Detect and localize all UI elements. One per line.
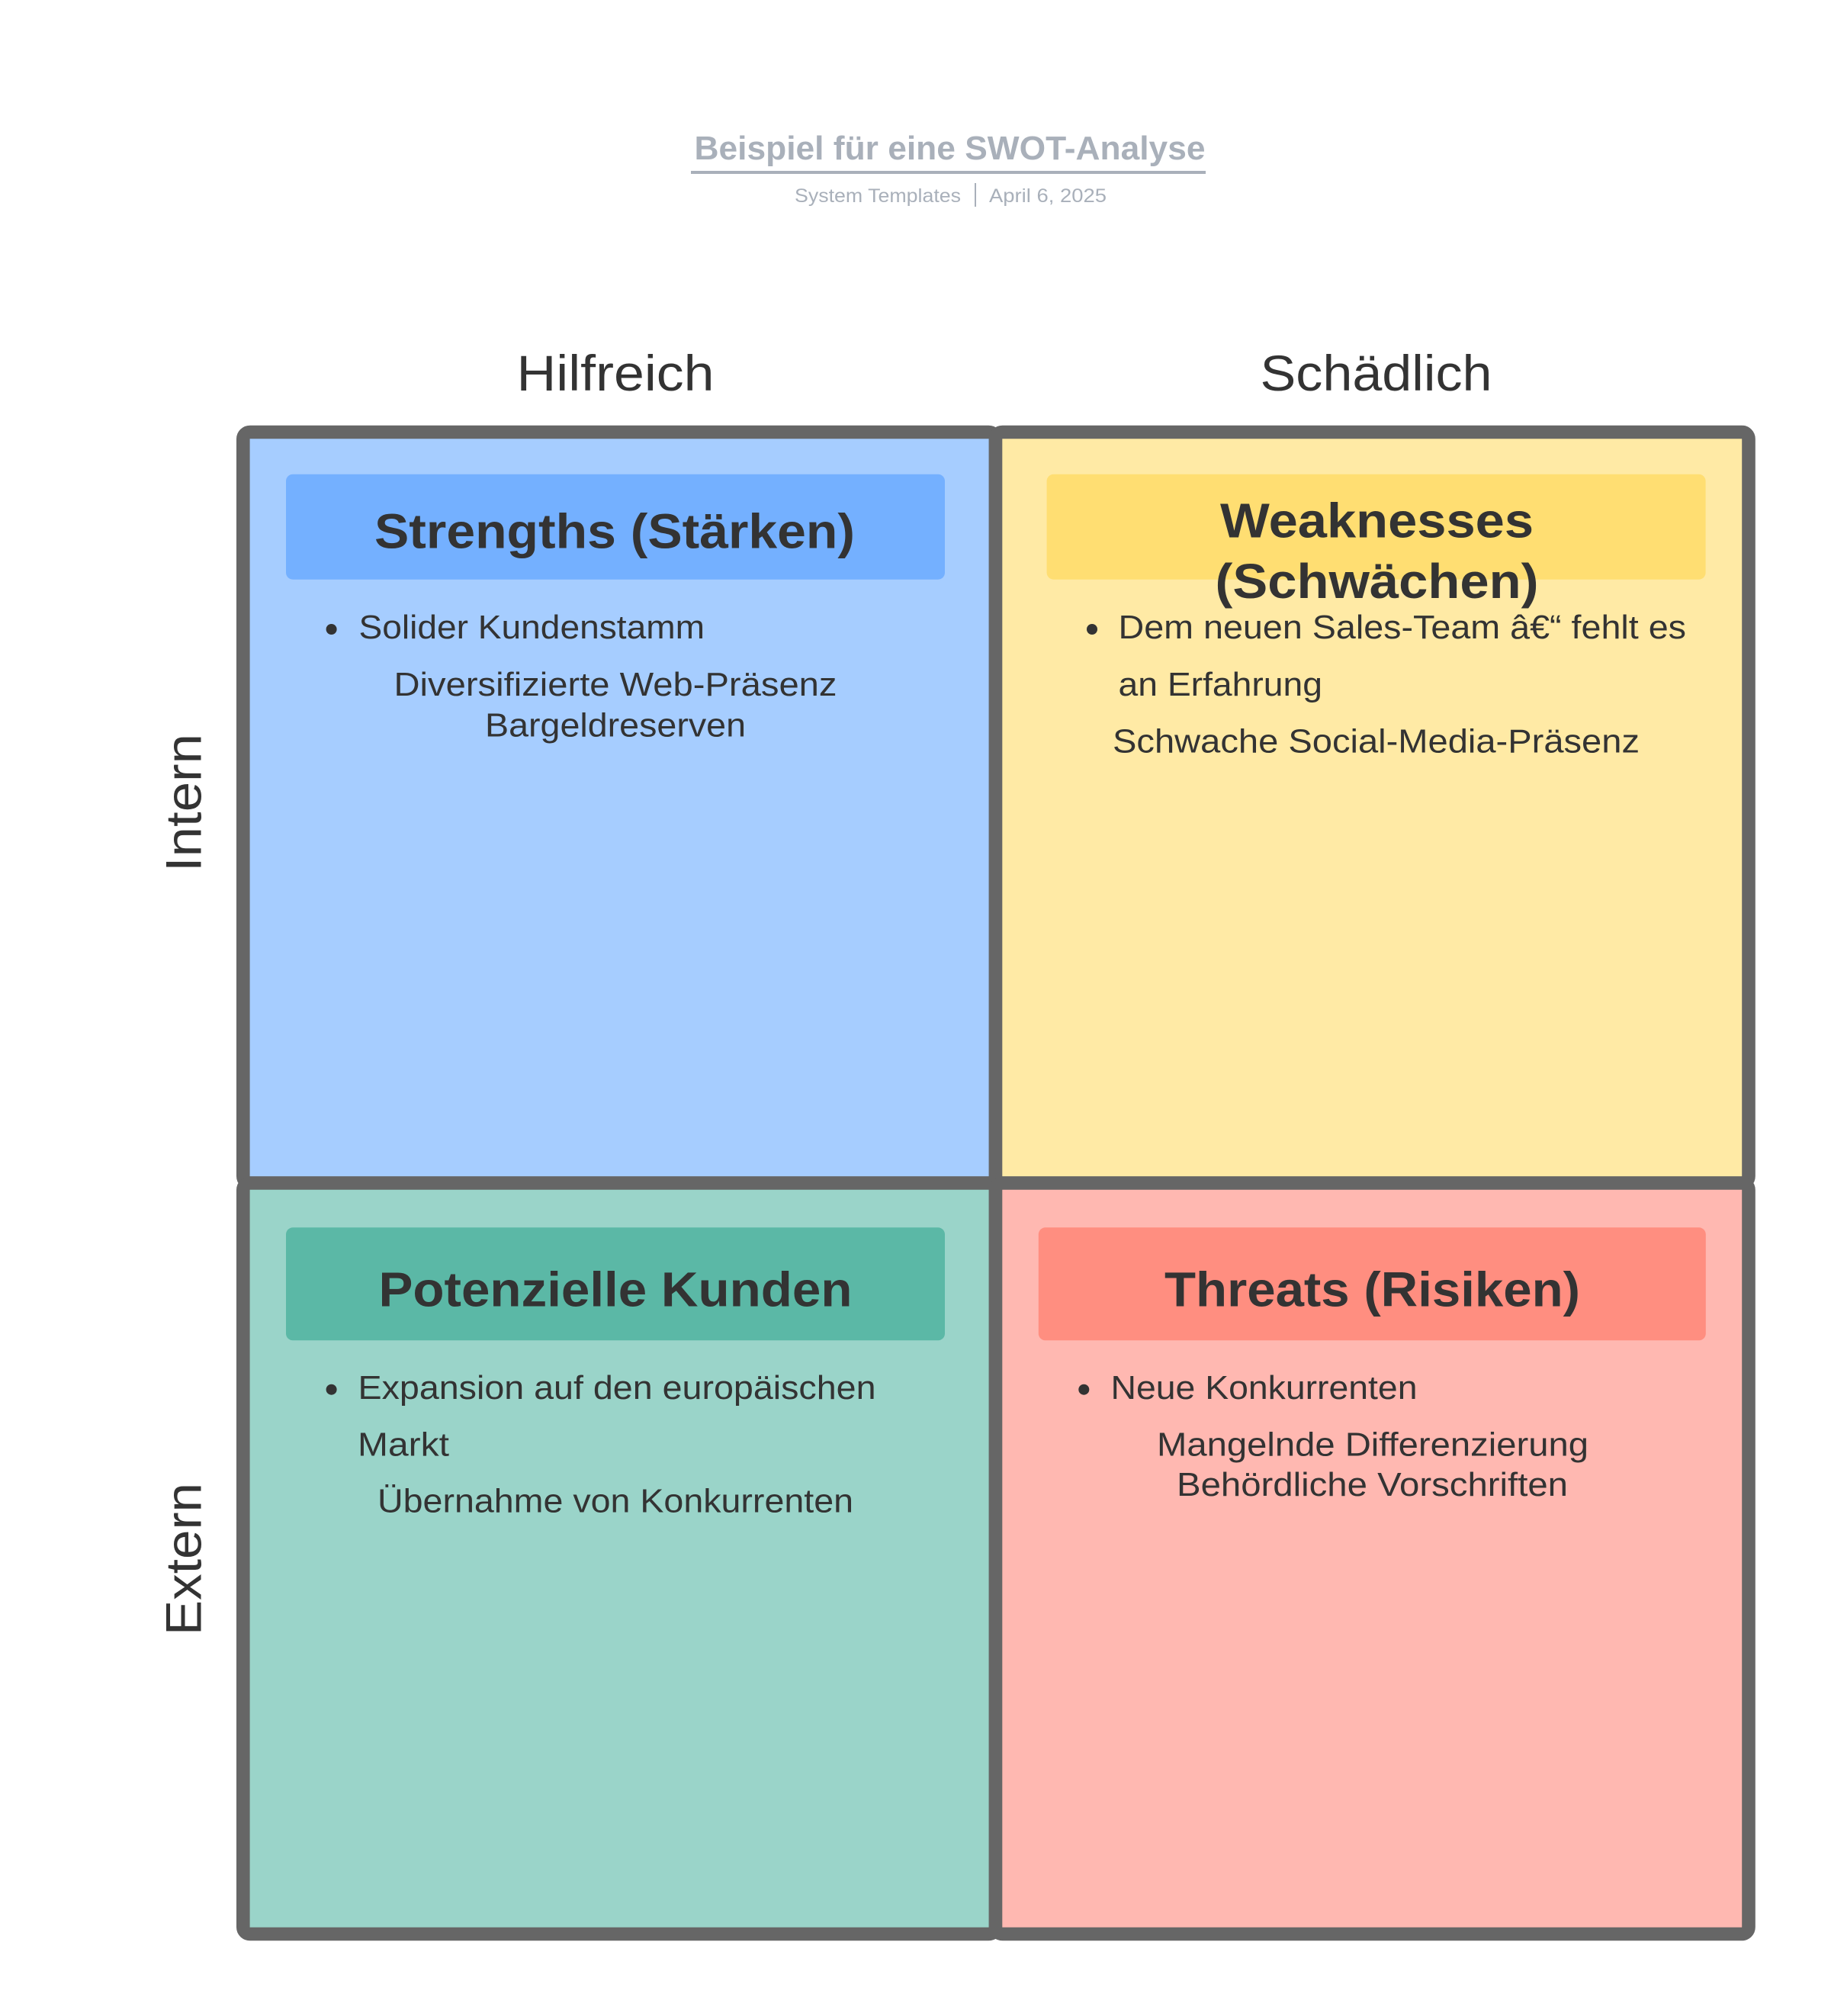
panel background xyxy=(243,432,996,1183)
weaknesses item 1 xyxy=(1118,609,1686,703)
strengths item 3: Bargeldreserven xyxy=(485,706,746,744)
threats item 2: Mangelnde Differenzierung xyxy=(1157,1426,1588,1463)
column heading: Schädlich: Schädlich xyxy=(1260,345,1492,401)
weaknesses heading xyxy=(1216,493,1539,609)
weaknesses item 1: Dem neuen Sales-Team â€“ fehlt es xyxy=(1118,609,1686,646)
weaknesses heading: (Schwächen) xyxy=(1216,554,1539,609)
bullet xyxy=(326,624,337,635)
opportunities item 1 xyxy=(358,1369,875,1464)
panel: opportunities xyxy=(243,1183,996,1934)
meta separator xyxy=(975,183,976,207)
panel: threats xyxy=(996,1183,1749,1934)
opportunities item 1: Markt xyxy=(358,1426,449,1464)
panel background xyxy=(243,1183,996,1934)
panel background xyxy=(996,1183,1749,1934)
strengths heading: Strengths (Stärken) xyxy=(374,503,855,558)
threats heading: Threats (Risiken) xyxy=(1164,1262,1580,1317)
weaknesses item 1: an Erfahrung xyxy=(1118,666,1322,703)
date: April 6, 2025 xyxy=(989,185,1107,207)
weaknesses heading: Weaknesses xyxy=(1220,493,1534,548)
strengths item 2: Diversifizierte Web-Präsenz xyxy=(394,666,837,703)
strengths header bar xyxy=(286,474,945,580)
panel: strengths xyxy=(243,432,996,1183)
author: System Templates xyxy=(795,185,961,207)
row heading: Extern: Extern xyxy=(156,1483,212,1635)
title: Beispiel für eine SWOT-Analyse xyxy=(694,130,1205,167)
opportunities item 1: Expansion auf den europäischen xyxy=(358,1369,875,1407)
row heading: Intern: Intern xyxy=(156,734,212,872)
weaknesses header bar xyxy=(1047,474,1706,580)
bullet xyxy=(326,1384,337,1395)
bullet xyxy=(1087,624,1097,635)
strengths item 1: Solider Kundenstamm xyxy=(358,609,705,646)
title underline xyxy=(691,171,1206,174)
threats item 1: Neue Konkurrenten xyxy=(1110,1369,1417,1407)
panel background xyxy=(996,432,1749,1183)
threats header bar xyxy=(1039,1227,1706,1340)
title block xyxy=(691,130,1206,207)
opportunities item 2: Übernahme von Konkurrenten xyxy=(377,1483,853,1520)
opportunities header bar xyxy=(286,1227,945,1340)
bullet xyxy=(1078,1384,1089,1395)
threats item 3: Behördliche Vorschriften xyxy=(1177,1466,1568,1503)
column heading: Hilfreich: Hilfreich xyxy=(517,345,714,401)
weaknesses item 2: Schwache Social-Media-Präsenz xyxy=(1113,723,1640,760)
opportunities heading: Potenzielle Kunden xyxy=(378,1262,853,1317)
panel: weaknesses xyxy=(996,432,1749,1183)
